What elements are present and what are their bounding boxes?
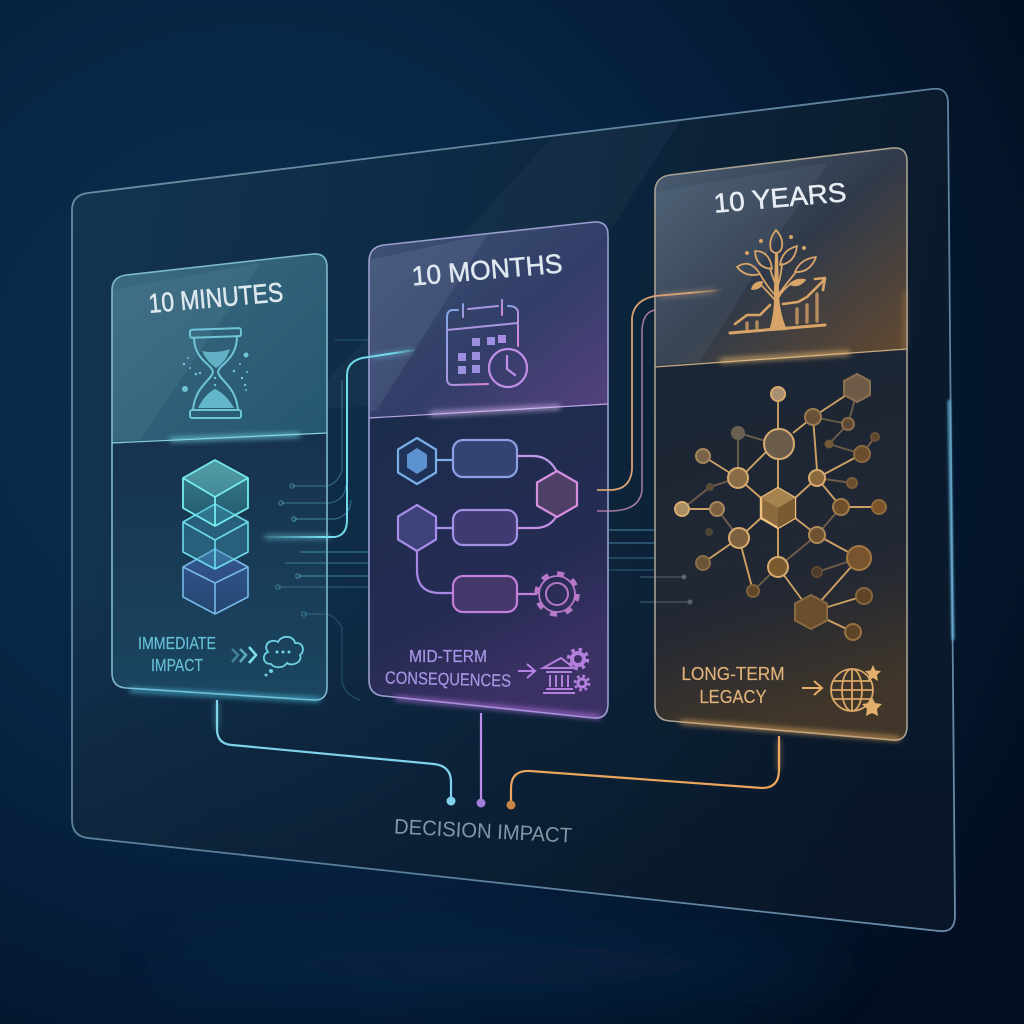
icon: chevrons (232, 647, 256, 663)
icon: arrow (802, 681, 822, 695)
heading: 10 minutes: 10 MINUTES (147, 277, 284, 319)
node: hexagon blue (398, 438, 453, 484)
connector: 10 minutes (217, 700, 456, 806)
label: immediate impact (138, 633, 216, 675)
icon: stacked cubes (183, 460, 248, 614)
flow diagram (398, 438, 578, 614)
divider (655, 349, 907, 367)
label: mid-term consequences: CONSEQUENCES (385, 667, 511, 691)
icon: hourglass (182, 328, 248, 418)
icon: thought bubble (264, 637, 303, 676)
label: immediate impact: IMPACT (151, 655, 203, 675)
main glass panel (72, 89, 955, 931)
node: central hub (761, 488, 795, 528)
label: long-term legacy: LONG-TERM (682, 664, 784, 684)
label: mid-term consequences (385, 646, 511, 691)
label: mid-term consequences: MID-TERM (409, 646, 487, 666)
node: hexagon right (537, 471, 577, 517)
cube: top (183, 460, 248, 526)
divider (369, 404, 608, 418)
icon: arrow (518, 664, 535, 678)
heading: 10 months: 10 MONTHS (410, 248, 564, 292)
footer: decision impact: DECISION IMPACT (394, 815, 573, 848)
network links (682, 388, 879, 632)
heading: 10 years: 10 YEARS (712, 177, 848, 219)
node: step 3 (453, 576, 517, 612)
network nodes (675, 374, 886, 640)
icon: bank with gears (543, 650, 589, 693)
label: long-term legacy: LEGACY (700, 687, 766, 707)
cube: middle (183, 504, 248, 569)
panel: 10 years (655, 148, 907, 740)
cube: bottom (183, 549, 248, 614)
connector: 10 years (506, 736, 779, 810)
icon: gear (536, 574, 578, 614)
node: step 2 (453, 510, 517, 545)
panel: 10 months (369, 222, 608, 718)
circuit lines: panel 1 to 2 (260, 340, 415, 700)
network diagram (675, 374, 886, 640)
divider (112, 433, 327, 443)
glow: panel 3 bottom edge (680, 722, 900, 739)
circuit lines: panel 2 to 3 (597, 290, 722, 604)
panel: 10 minutes (112, 254, 327, 700)
node: step 1 (453, 440, 517, 477)
icon: calendar and clock (447, 300, 527, 387)
glow: panel 2 bottom edge (395, 698, 600, 717)
connector: 10 months (476, 713, 486, 808)
label: immediate impact: IMMEDIATE (138, 633, 216, 653)
label: long-term legacy (682, 664, 784, 707)
glow: panel 1 bottom edge (130, 690, 320, 700)
node: hexagon left (398, 505, 436, 551)
icon: tree with growth chart (730, 230, 825, 333)
icon: globe with stars (831, 665, 882, 716)
